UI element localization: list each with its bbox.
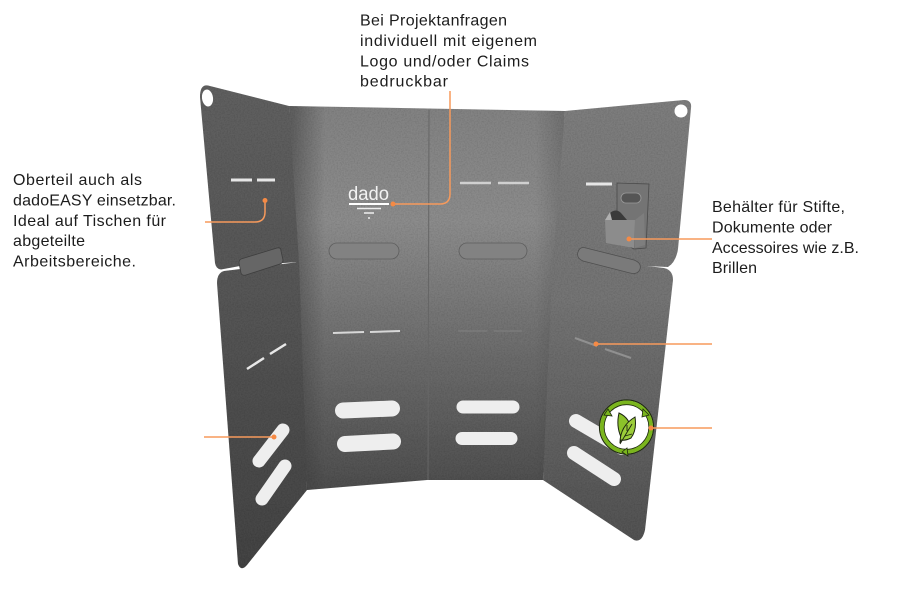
leader dot: [626, 236, 632, 242]
corner hole right: [674, 104, 688, 118]
callout text: Behälter für Stifte,: [712, 199, 845, 216]
holder for pens: [605, 183, 649, 249]
right panel upper: [553, 100, 691, 267]
dado logo: [348, 184, 389, 219]
callout text: Oberteil auch als: [13, 172, 142, 189]
callout text: Ideal auf Tischen für: [13, 213, 167, 230]
leader dot: [262, 198, 268, 203]
right panel lower: [543, 255, 673, 541]
leader line: [393, 91, 450, 204]
leader: left slot: [204, 434, 276, 440]
leader: recycling icon: [648, 426, 712, 430]
left panel upper: [200, 85, 299, 270]
leader dot: [390, 202, 396, 206]
icon: recycling leaves: [600, 400, 654, 456]
callout text: Logo und/oder Claims: [360, 53, 529, 70]
callout right: holder: [626, 199, 863, 277]
callout text: Dokumente oder: [712, 220, 833, 236]
callout left: upper part usable: [13, 172, 268, 270]
tabs: [239, 243, 640, 275]
product: folding screen: [200, 85, 691, 568]
slits middle: [247, 331, 631, 369]
callout text: dadoEASY einsetzbar.: [13, 192, 176, 210]
dado logo: dado: [348, 184, 389, 205]
callout text: bedruckbar: [360, 74, 449, 90]
center fold line: [428, 110, 429, 480]
callout text: Brillen: [712, 260, 757, 277]
callout text: abgeteilte: [13, 233, 85, 250]
leader line: [629, 238, 712, 240]
slits upper: [231, 180, 612, 184]
callout text: Accessoires wie z.B.: [712, 240, 859, 257]
callout text: Bei Projektanfragen: [360, 12, 507, 30]
center panel: [289, 106, 565, 490]
callout text: individuell mit eigenem: [360, 33, 537, 50]
leader: right slit: [594, 342, 712, 346]
callout top: logo printing: [360, 12, 542, 206]
left panel lower: [217, 262, 307, 568]
corner hole left: [201, 89, 214, 107]
leader line: [205, 200, 265, 222]
handle slots: [259, 407, 622, 499]
callout text: Arbeitsbereiche.: [13, 254, 136, 270]
